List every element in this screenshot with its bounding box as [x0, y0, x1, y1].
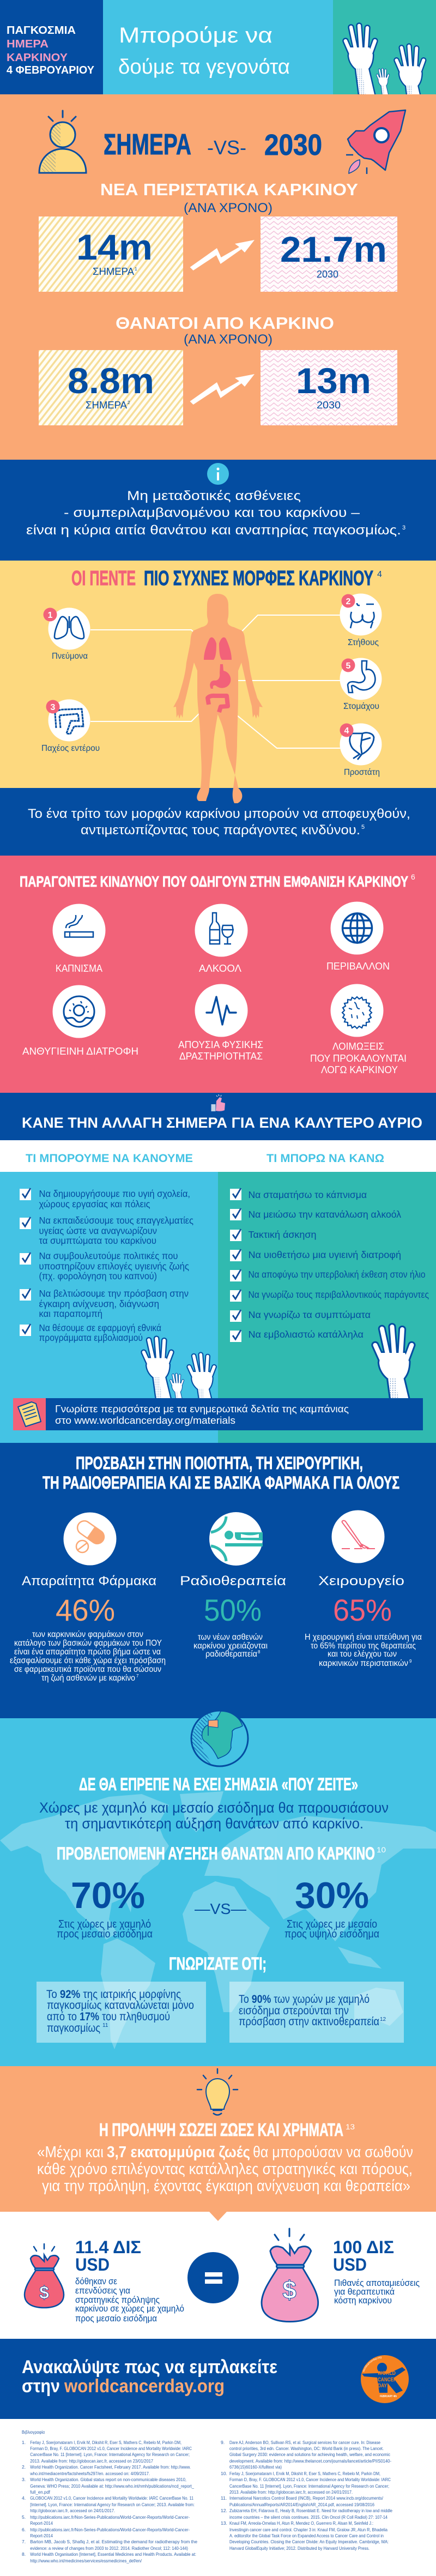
stat: low income: [57, 1875, 153, 1940]
stat: savings: USD: [333, 2255, 367, 2274]
heading: did you know: ΓΝΩΡΙΖΑΤΕ ΟΤΙ;: [169, 1954, 267, 1973]
icon: equals: [187, 2252, 239, 2303]
heading: risk factors: 6: [411, 872, 415, 881]
references left column: http://www.who.int/medicines/services/essmedicines_def/en/: [30, 2558, 142, 2563]
references right column: Publications/AnnualReports/AR2014/English/AR_2014.pdf, accessed 19/08/2016: [229, 2502, 374, 2507]
quote: 3,7 εκατομμύρια ζωές: [107, 2144, 250, 2161]
references left column: 6.: [22, 2527, 26, 2532]
treatment: radiotherapy: [180, 1512, 286, 1659]
references left column: Forman D, Bray, F. GLOBOCAN 2012 v1.0, Cancer Incidence and Mortality Worldwide: IARC: [30, 2446, 192, 2451]
stat: low income: 70%: [71, 1875, 145, 1916]
stat box: deaths 2030: [261, 350, 397, 425]
treatment: surgery: και του ελέγχου των: [328, 1650, 397, 1659]
references left column: Barton MB, Jacob S, Shafiq J, et al. Estimating the demand for radiotherapy from the: [30, 2539, 197, 2544]
references left column: http://publications.iarc.fr/Non-Series-Publications/World-Cancer-Reports/World-Cancer-: [30, 2514, 190, 2520]
heading: new cases: (ΑΝΑ ΧΡΟΝΟ): [184, 201, 272, 215]
references right column: Forman D, Bray, F. GLOBOCAN 2012 v1.0, Cancer Incidence and Mortality Worldwide: IARC: [229, 2477, 391, 2482]
stat: low income: προς μεσαίο εισόδημα: [57, 1928, 153, 1940]
logo: world cancer day: [361, 2355, 409, 2403]
icon: red money bag: [25, 2244, 64, 2308]
risk: smoking: [52, 904, 106, 974]
icon: rocket: [346, 110, 405, 174]
stat: savings: Πιθανές αποταμιεύσεις: [334, 2278, 420, 2288]
stat: invested: 11.4 ΔΙΣ: [75, 2237, 141, 2257]
treatment: essential medicines: 46%: [56, 1593, 115, 1627]
treatment: radiotherapy: 8: [258, 1650, 261, 1654]
panel: prevention saves lives and money: [0, 2066, 436, 2221]
heading: access: [43, 1453, 399, 1492]
stat box: cases today: 1: [135, 267, 137, 272]
item: healthier schools: [20, 1188, 190, 1209]
treatment: essential medicines: των καρκινικών φαρμάκων στον: [32, 1630, 143, 1639]
references right column: 13.: [221, 2520, 227, 2526]
panel: investment vs savings: [25, 2229, 420, 2324]
heading: five most common: 4: [377, 570, 382, 579]
item: reduce alcohol: Να μειώσω την κατανάλωση αλκοόλ: [249, 1209, 401, 1220]
call to action text: στην: [22, 2376, 60, 2397]
treatment: essential medicines: Απαραίτητα Φάρμακα: [22, 1574, 156, 1588]
panel: today vs 2030: [0, 94, 436, 460]
references left column: http://publications.iarc.fr/Non-Series-Publications/World-Cancer-Reports/World-Cancer-: [30, 2527, 190, 2532]
stat: high income: 30%: [295, 1875, 369, 1916]
quote: «Μέχρι και: [37, 2144, 104, 2161]
logo: world cancer day: CANCER: [378, 2376, 397, 2383]
stat box: deaths 2030: 13m: [296, 360, 371, 401]
stat: invested: επενδύσεις για: [75, 2285, 130, 2296]
references left column: 1.: [22, 2440, 26, 2445]
stat box: deaths today: ΣΗΜΕΡΑ: [86, 400, 127, 411]
title: today vs 2030: -VS-: [207, 136, 246, 159]
references right column: income countries – the silent crisis continues. 2015. Clin Oncol (R Coll Radiol) 27: 107-14: [229, 2514, 387, 2520]
references left column: Report-2014: [30, 2533, 53, 2538]
quote: [37, 2144, 413, 2195]
panel: column headings: ΤΙ ΜΠΟΡΟΥΜΕ ΝΑ ΚΑΝΟΥΜΕ: [26, 1152, 193, 1165]
title: today vs 2030: 2030: [264, 129, 322, 161]
heading: projected increase: 10: [377, 1845, 386, 1854]
risk: infections: ΠΟΥ ΠΡΟΚΑΛΟΥΝΤΑΙ: [310, 1053, 407, 1064]
references right column: Knaul FM, Arreola-Ornelas H, Atun R, Mendez O, Guerrero R, Alsan M, Seinfeld J.:: [229, 2520, 373, 2526]
risk: infections: [310, 984, 407, 1075]
organ: colon: 3: [51, 703, 56, 712]
pink lungs: [204, 637, 232, 660]
item: educate professionals: [20, 1215, 193, 1246]
info text: είναι η κύρια αιτία θανάτου και αναπηρίας παγκοσμίως.: [26, 523, 401, 538]
organ: breast: [340, 593, 382, 647]
header title: Μπορούμε να: [119, 23, 272, 47]
stat: savings: [333, 2237, 420, 2306]
stat box: cases today: ΣΗΜΕΡΑ: [93, 266, 134, 277]
item: get vaccinated: Να εμβολιαστώ κατάλληλα: [249, 1329, 364, 1340]
panel: footer call to action: [0, 2339, 436, 2419]
references left column: http://globocan.iarc.fr, accessed on 24/01/2017.: [30, 2508, 115, 2513]
item: educate professionals: τα συμπτώματα του καρκίνου: [39, 1235, 156, 1246]
heading: new cases: [100, 180, 358, 215]
stat: savings: 100 ΔΙΣ: [333, 2237, 394, 2257]
panel: one third preventable: αντιμετωπίζοντας τους παράγοντες κινδύνου.: [81, 823, 360, 838]
treatment: radiotherapy: των νέων ασθενών: [198, 1633, 263, 1642]
item: exercise: Τακτική άσκηση: [249, 1229, 316, 1240]
treatment: essential medicines: 7: [136, 1674, 139, 1678]
header date block: [0, 0, 103, 94]
fact box: morphine: Το 92% της ιατρικής μορφίνης: [46, 1988, 181, 2001]
item: healthy diet: Να υιοθετήσω μια υγιεινή διατροφή: [249, 1249, 401, 1260]
treatment: radiotherapy: Ραδιοθεραπεία: [180, 1574, 286, 1588]
references right column: 12.: [221, 2508, 227, 2513]
stat box: deaths today: 8.8m: [68, 360, 154, 401]
references right column: 10.: [221, 2471, 227, 2476]
risk: infections: ΛΟΙΜΩΞΕΙΣ: [332, 1041, 384, 1052]
references: [22, 2429, 392, 2563]
references right column: 11.: [221, 2495, 227, 2501]
fact box: radiotherapy: πρόσβαση στην ακτινοθεραπεία: [239, 2015, 379, 2028]
panel: make the change today: [0, 1093, 436, 1140]
panel: non-communicable diseases info: [0, 460, 436, 561]
risk: unhealthy diet: [22, 985, 138, 1057]
header date block: ΗΜΕΡΑ: [7, 38, 49, 50]
organ: colon: [41, 699, 100, 753]
references right column: Dare AJ, Anderson BO, Sullivan RS, et al. Surgical services for cancer cure. In: Disease: [229, 2440, 380, 2445]
references left column: 4.: [22, 2495, 26, 2501]
icon: thumbs up: [211, 1094, 225, 1111]
organ: stomach: Στομάχου: [343, 702, 379, 711]
world map background: [0, 1791, 436, 2049]
fact box: morphine: από το 17% του πληθυσμού: [47, 2011, 170, 2023]
item: stop smoking: Να σταματήσω το κάπνισμα: [249, 1189, 367, 1200]
panel: what we can do: [0, 1172, 218, 1443]
references right column: Developing Countries. Closing the Cancer Divide: An Equity Imperative. Cambridge, MA:: [229, 2539, 389, 2544]
header title: δούμε τα γεγονότα: [118, 56, 290, 79]
title: today vs 2030: [104, 128, 322, 161]
item: healthier schools: Να δημιουργήσουμε πιο υγιή σχολεία,: [39, 1188, 190, 1199]
risk: unhealthy diet: ΑΝΘΥΓΙΕΙΝΗ ΔΙΑΤΡΟΦΗ: [22, 1046, 138, 1057]
fact box: radiotherapy: 12: [380, 2017, 386, 2023]
panel: one third preventable: [0, 788, 436, 856]
treatment: essential medicines: [10, 1513, 166, 1683]
stat box: deaths today: 2: [128, 400, 130, 405]
body silhouette with organs: [173, 594, 263, 803]
risk: infections: ΛΟΓΩ ΚΑΡΚΙΝΟΥ: [321, 1064, 398, 1075]
item: know symptoms: Να γνωρίζω τα συμπτώματα: [249, 1309, 371, 1320]
callout: campaign materials: [13, 1398, 423, 1430]
references left column: 2013. Available from: http://globocan.iarc.fr, accessed on 23/01/2017: [30, 2458, 153, 2464]
organ: prostate: Προστάτη: [344, 768, 380, 777]
info text: [26, 489, 405, 538]
item: vaccination: [20, 1322, 161, 1343]
stat: invested: USD: [75, 2255, 110, 2274]
item: healthier schools: χώρους εργασίας και πόλεις: [39, 1199, 150, 1209]
references left column: who.int/mediacentre/factsheets/fs297/en. accessed on: 4/09/2017.: [29, 2471, 150, 2476]
treatment: radiotherapy: 50%: [204, 1593, 262, 1627]
stat: high income: [284, 1875, 379, 1940]
organ: lungs: [44, 607, 90, 661]
references left column: CancerBase No. 11 [Internet]. Lyon, France: International Agency for Research on Cancer;: [30, 2452, 190, 2457]
treatment: surgery: καρκινικών περιστατικών: [319, 1659, 408, 1668]
info text: - συμπεριλαμβανομένου και του καρκίνου –: [64, 505, 360, 520]
header date block: ΚΑΡΚΙΝΟΥ: [7, 51, 68, 64]
risk: smoking: ΚΑΠΝΙΣΜΑ: [56, 963, 102, 974]
treatment: essential medicines: κατάλογο των βασικών φαρμάκων του ΠΟΥ: [14, 1639, 162, 1648]
fact box: radiotherapy: Το 90% των χωρών με χαμηλό: [239, 1993, 370, 2006]
references right column: CancerBase No. 11 [Internet]. Lyon, France: International Agency for Research on Cancer;: [229, 2483, 389, 2489]
icon: pills: [75, 1518, 107, 1552]
references right column: Harvard GlobalEquity Initiative; 2012. Distributed by Harvard University Press.: [229, 2545, 370, 2551]
risk: alcohol: ΑΛΚΟΟΛ: [199, 963, 241, 974]
organ: lungs: 1: [48, 611, 53, 620]
item: early detection: [20, 1288, 189, 1319]
heading: deaths: (ΑΝΑ ΧΡΟΝΟ): [184, 332, 272, 347]
item: advocate policies: (πχ. φορολόγηση του καπνού): [39, 1271, 157, 1281]
stat box: cases 2030: 2030: [317, 269, 338, 280]
item: vaccination: Να θέσουμε σε εφαρμογή εθνικά: [39, 1322, 161, 1333]
organ: breast: 2: [346, 597, 351, 606]
icon: person: [39, 111, 86, 173]
item: advocate policies: [20, 1250, 189, 1281]
arrow: deaths rising: [190, 374, 255, 405]
text: low income countries: Χώρες με χαμηλό και μεσαίο εισόδημα θα παρουσιάσουν: [39, 1799, 389, 1816]
panel: one third preventable: 5: [361, 824, 365, 830]
stat: invested: [75, 2237, 184, 2324]
references left column: World Health Organization. Global status report on non-communicable diseases 2010,: [30, 2477, 186, 2482]
panel: column headings: [0, 1140, 436, 1172]
stat: invested: καρκίνου σε χώρες με χαμηλό: [75, 2303, 184, 2314]
text: low income countries: [39, 1799, 389, 1832]
stat: invested: στρατηγικές πρόληψης: [75, 2295, 160, 2305]
quote: θα μπορούσαν να σωθούν: [253, 2144, 413, 2161]
references left column: World Health Organization. Cancer Factsheet, February 2017. Available from: http://www.: [30, 2464, 191, 2470]
treatment: essential medicines: εξασφαλίσουμε ότι κάθε χώρα έχει πρόσβαση: [10, 1656, 166, 1665]
references left column: Geneva: WHO Press; 2010 Available at: http://www.who.int/nmh/publications/ncd_report_: [30, 2483, 194, 2489]
fact box: morphine: παγκοσμίως: [47, 2022, 100, 2035]
references right column: development. Available from: http://www.thelancet.com/journals/lancet/article/PIIS0140-: [229, 2458, 391, 2464]
treatment: essential medicines: σε φαρμακευτικά προϊόντα που θα σώσουν: [14, 1665, 161, 1674]
organ: prostate: [340, 723, 382, 777]
heading: prevention: 13: [346, 2122, 355, 2131]
call to action text: worldcancerday.org: [64, 2376, 225, 2397]
item: educate professionals: υγείας ώστε να αναγνωρίζουν: [39, 1225, 157, 1236]
references right column: International Narcotics Control Board (INCB), Report 2014 www.incb.org/documents/: [229, 2495, 384, 2501]
organ: colon: Παχέος εντέρου: [41, 744, 100, 753]
logo: world cancer day: worldcancerday.org: [363, 2357, 382, 2372]
icon: info: [207, 463, 229, 485]
stat: invested: προς μεσαίο εισόδημα: [75, 2313, 157, 2324]
pink stomach: [210, 664, 231, 689]
connector lines: [90, 615, 341, 748]
references left column: 3.: [22, 2477, 26, 2482]
heading: deaths: [116, 314, 334, 347]
vs divider: —VS—: [195, 1900, 246, 1917]
info text: Μη μεταδοτικές ασθένειες: [127, 489, 301, 503]
logo: world cancer day: DAY: [378, 2382, 387, 2389]
organ: breast: Στήθους: [348, 638, 379, 647]
references left column: evidence: a review of changes from 2003 to 2012. 2014. Radiother Oncol; 112: 140-144): [30, 2545, 188, 2551]
info text: 3: [402, 525, 405, 531]
stat: high income: Στις χώρες με μεσαίο: [287, 1918, 377, 1930]
references right column: 9.: [221, 2440, 225, 2445]
treatment: surgery: Η χειρουργική είναι υπεύθυνη για: [305, 1633, 422, 1642]
references right column: Investingin cancer care and control. Chapter 3 in: Knaul FM, Gralow JR, Atun R, Bhadelia: [229, 2527, 387, 2532]
treatment: radiotherapy: ραδιοθεραπεία: [205, 1650, 257, 1659]
header date block: ΠΑΓΚΟΣΜΙΑ: [7, 24, 76, 37]
stat: invested: δόθηκαν σε: [75, 2276, 117, 2286]
treatment: surgery: 65%: [333, 1593, 392, 1627]
item: advocate policies: Να συμβουλευτούμε πολιτικές που: [39, 1250, 178, 1261]
panel: what I can do: [218, 1172, 436, 1443]
treatment: surgery: Χειρουργείο: [318, 1574, 404, 1588]
stat box: deaths 2030: 2030: [317, 400, 341, 411]
call to action text: [22, 2357, 277, 2397]
icon: red money bag: $: [39, 2283, 49, 2302]
call to action text: Ανακαλύψτε πως να εμπλακείτε: [22, 2357, 277, 2378]
references left column: 5.: [22, 2514, 26, 2520]
risk: alcohol: [195, 904, 247, 974]
references left column: 2.: [22, 2464, 26, 2470]
text: low income countries: τη σημαντικότερη αύξηση θανάτων από καρκίνο.: [65, 1815, 364, 1832]
treatment: essential medicines: τη ζωή ασθενών με καρκίνο: [41, 1674, 135, 1683]
references right column: [221, 2440, 392, 2551]
panel: column headings: ΤΙ ΜΠΟΡΩ ΝΑ ΚΑΝΩ: [267, 1152, 384, 1165]
fact box: morphine: 11: [102, 2023, 108, 2029]
references left column: 7.: [22, 2539, 26, 2544]
references left column: World Health Organisation [Internet], Essential Medicines and Health Products. Available at:: [30, 2551, 196, 2557]
risk: physical inactivity: ΔΡΑΣΤΗΡΙΟΤΗΤΑΣ: [179, 1051, 263, 1062]
stat box: cases 2030: 21.7m: [280, 229, 387, 269]
icon: globe with flag: [191, 1711, 248, 1766]
references left column: Report-2014: [30, 2520, 53, 2526]
panel: access to treatment: [0, 1443, 436, 1718]
stat box: cases today: [39, 216, 183, 292]
icon: light bulb: [197, 2069, 238, 2115]
stat: high income: προς υψηλό εισόδημα: [284, 1928, 379, 1940]
pink colon: [208, 696, 228, 712]
stat: savings: κόστη καρκίνου: [334, 2295, 392, 2306]
icon: document: [18, 1402, 41, 1427]
icon: raised hands: [346, 26, 431, 144]
item: advocate policies: υποστηρίζουν επιλογές υγιεινής ζωής: [39, 1261, 189, 1272]
stat box: cases today: 14m: [76, 227, 153, 267]
item: get vaccinated: [230, 1329, 364, 1342]
panel: one third preventable: Το ένα τρίτο των μορφών καρκίνου μπορούν να αποφευχθούν,: [28, 806, 410, 821]
references right column: A. editorsfor the Global Task Force on Expanded Access to Cancer Care and Control in: [229, 2533, 384, 2538]
organ: lungs: Πνεύμονα: [52, 652, 88, 661]
icon: pink money bag: [262, 2229, 318, 2322]
stat box: deaths today: [39, 350, 183, 425]
stat: low income: Στις χώρες με χαμηλό: [58, 1918, 151, 1930]
panel: header: [0, 0, 436, 144]
header date block: 4 ΦΕΒΡΟΥΑΡΙΟΥ: [7, 64, 94, 76]
stat: savings: για θεραπευτικά: [334, 2286, 395, 2297]
heading: new cases: ΝΕΑ ΠΕΡΙΣΤΑΤΙΚΑ ΚΑΡΚΙΝΟΥ: [100, 180, 358, 199]
fact box: morphine: [37, 1982, 206, 2043]
header title: [103, 0, 333, 94]
risk: physical inactivity: [178, 984, 263, 1062]
references right column: Zubizarreta EH, Fidarova E, Healy B, Rosenblatt E. Need for radiotherapy in low and middle: [229, 2508, 392, 2513]
panel: where you live: [0, 1718, 436, 2066]
callout: campaign materials: Γνωρίστε περισσότερα με τα ενημερωτικά δελτία της καμπάνιας: [55, 1404, 349, 1415]
references left column: 8.: [22, 2551, 26, 2557]
item: educate professionals: Να εκπαιδεύσουμε τους επαγγελματίες: [39, 1215, 193, 1226]
organ: prostate: 4: [344, 726, 349, 736]
callout: campaign materials: στο www.worldcancerday.org/materials: [55, 1415, 235, 1426]
logo: world cancer day: WORLD: [378, 2370, 396, 2376]
icon: pink money bag: $: [282, 2276, 296, 2304]
treatment: surgery: [305, 1510, 422, 1668]
heading: make the change: ΚΑΝΕ ΤΗΝ ΑΛΛΑΓΗ ΣΗΜΕΡΑ ΓΙΑ ΕΝΑ ΚΑΛΥΤΕΡΟ ΑΥΡΙΟ: [22, 1115, 422, 1131]
references right column: Ferlay J, Soerjomataram I, Ervik M, Dikshit R, Eser S, Mathers C, Rebelo M, Parkin DM,: [229, 2471, 380, 2476]
panel: five most common cancers: [0, 561, 436, 788]
logo: world cancer day: FEBRUARY 4th: [380, 2395, 397, 2398]
item: early detection: έγκαιρη ανίχνευση, διάγνωση: [39, 1298, 159, 1309]
icon: raised hands in columns: [141, 1323, 415, 1398]
item: exercise: [230, 1229, 316, 1241]
risk: environment: ΠΕΡΙΒΑΛΛΟΝ: [326, 961, 390, 972]
stat box: cases 2030: [261, 216, 397, 292]
icon: scalpel: [342, 1521, 375, 1549]
references right column: 2013. Available from: http://globocan.iarc.fr, accessed on 24/01/2017.: [229, 2489, 353, 2495]
references right column: Global Surgery 2030: evidence and solutions for achieving health, welfare, and economic: [229, 2452, 391, 2457]
references: Βιβλιογραφία: [22, 2429, 45, 2435]
fact box: radiotherapy: [229, 1982, 404, 2043]
references right column: 6736(15)60160-X/fulltext via): [229, 2464, 282, 2470]
item: early detection: και παραπομπή: [39, 1308, 102, 1319]
treatment: surgery: το 65% περίπου της θεραπείας: [311, 1641, 416, 1651]
icon: radiotherapy machine: [211, 1516, 263, 1561]
item: early detection: Να βελτιώσουμε την πρόσβαση στην: [39, 1288, 189, 1299]
heading: deaths: ΘΑΝΑΤΟΙ ΑΠΟ ΚΑΡΚΙΝΟ: [116, 314, 334, 333]
treatment: essential medicines: είναι ένα απαραίτητο πρώτο βήμα ώστε να: [14, 1647, 161, 1657]
treatment: surgery: 9: [409, 1659, 412, 1664]
heading: five most common: [71, 567, 382, 590]
references left column: Ferlay J, Soerjomataram I, Ervik M, Dikshit R, Eser S, Mathers C, Rebelo M, Parkin DM,: [30, 2440, 181, 2445]
arrow: cases rising: [190, 240, 255, 270]
treatment: radiotherapy: καρκίνου χρειάζονται: [193, 1641, 268, 1651]
item: vaccination: προγράμματα εμβολιασμού: [39, 1332, 143, 1343]
heading: five most common: ΟΙ ΠΕΝΤΕ: [71, 567, 136, 590]
organ: stomach: [340, 658, 382, 711]
references right column: control priorities, 3rd edn. Cancer. Washington, DC: World Bank (in press). The Lancet.: [229, 2446, 384, 2451]
references left column: [Internet]. Lyon, France: International Agency for Research on Cancer; 2013. Available from:: [30, 2502, 195, 2507]
title: today vs 2030: ΣΗΜΕΡΑ: [104, 128, 191, 161]
references left column: full_en.pdf: [30, 2489, 51, 2495]
panel: risk factors: [0, 856, 436, 1093]
references left column: [22, 2440, 197, 2563]
fact box: radiotherapy: εισόδημα στερούνται την: [239, 2005, 349, 2017]
risk: physical inactivity: ΑΠΟΥΣΙΑ ΦΥΣΙΚΗΣ: [178, 1039, 263, 1050]
organ: stomach: 5: [346, 661, 351, 671]
references left column: GLOBOCAN 2012 v1.0, Cancer Incidence and Mortality Worldwide: IARC CancerBase No. 11: [30, 2495, 193, 2501]
fact box: morphine: παγκοσμίως καταναλώνεται μόνο: [47, 1999, 194, 2012]
risk: environment: [326, 902, 390, 972]
